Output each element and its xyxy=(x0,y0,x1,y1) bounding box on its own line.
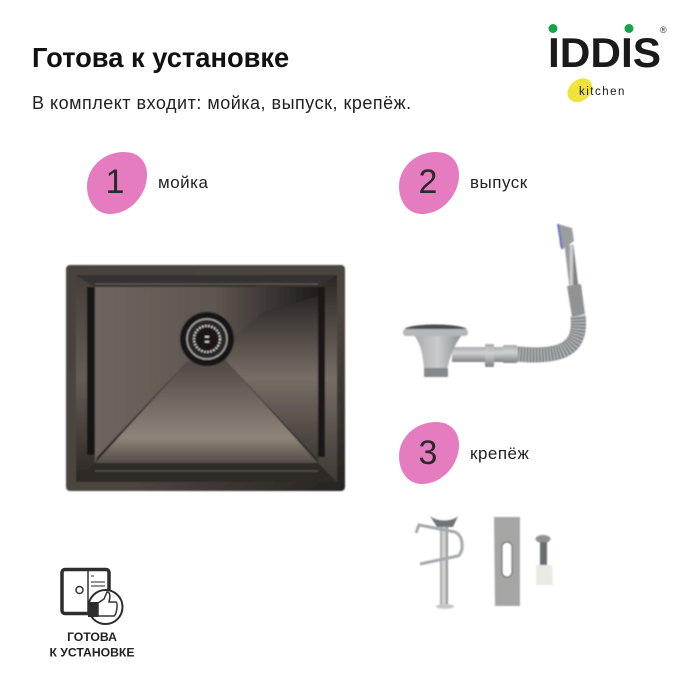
icon caption: ГОТОВА xyxy=(67,630,117,644)
sink floor right panel xyxy=(226,296,318,460)
logo: IDDIS kitchen: kitchen xyxy=(579,86,626,98)
horizontal pipe xyxy=(452,347,518,362)
badge 3 xyxy=(399,422,459,484)
clip bolt xyxy=(416,516,462,609)
overflow head xyxy=(558,224,574,249)
badge 3: 3 xyxy=(419,434,437,472)
sink floor front panel xyxy=(95,361,318,463)
strainer flange xyxy=(403,329,468,336)
sink right wall xyxy=(318,275,337,482)
sink left wall xyxy=(76,275,95,482)
logo: IDDIS kitchen: IDDIS xyxy=(548,29,661,76)
corrugated hose xyxy=(517,316,578,355)
drain cone xyxy=(414,335,462,370)
badge 1 xyxy=(87,152,147,214)
mounting clips illustration xyxy=(416,516,553,609)
label: выпуск: выпуск xyxy=(470,173,528,192)
label: мойка: мойка xyxy=(158,173,208,192)
subtitle text: В комплект входит: мойка, выпуск, крепёж. xyxy=(32,93,412,113)
icon: ready to install xyxy=(62,570,122,624)
overflow collar xyxy=(567,284,585,317)
badge 2: 2 xyxy=(419,163,437,201)
pipe nuts xyxy=(485,344,494,367)
clip plate xyxy=(494,517,520,606)
icon caption: К УСТАНОВКЕ xyxy=(49,646,135,660)
sink floor back panel xyxy=(95,287,318,463)
sink illustration xyxy=(66,265,345,491)
sink front wall xyxy=(76,463,337,482)
title: Готова к установке xyxy=(32,42,289,73)
sink back wall xyxy=(76,275,337,287)
overflow tube xyxy=(569,245,574,288)
badge 2 xyxy=(399,152,459,214)
sink drain xyxy=(180,312,234,366)
logo: IDDIS kitchen: ® xyxy=(660,25,667,35)
badge 1: 1 xyxy=(106,163,124,201)
label: крепёж: крепёж xyxy=(470,444,530,463)
waste fitting illustration xyxy=(403,224,585,377)
screw and plug xyxy=(536,535,553,585)
icon caption xyxy=(49,630,135,660)
logo: IDDIS kitchen xyxy=(548,24,667,102)
